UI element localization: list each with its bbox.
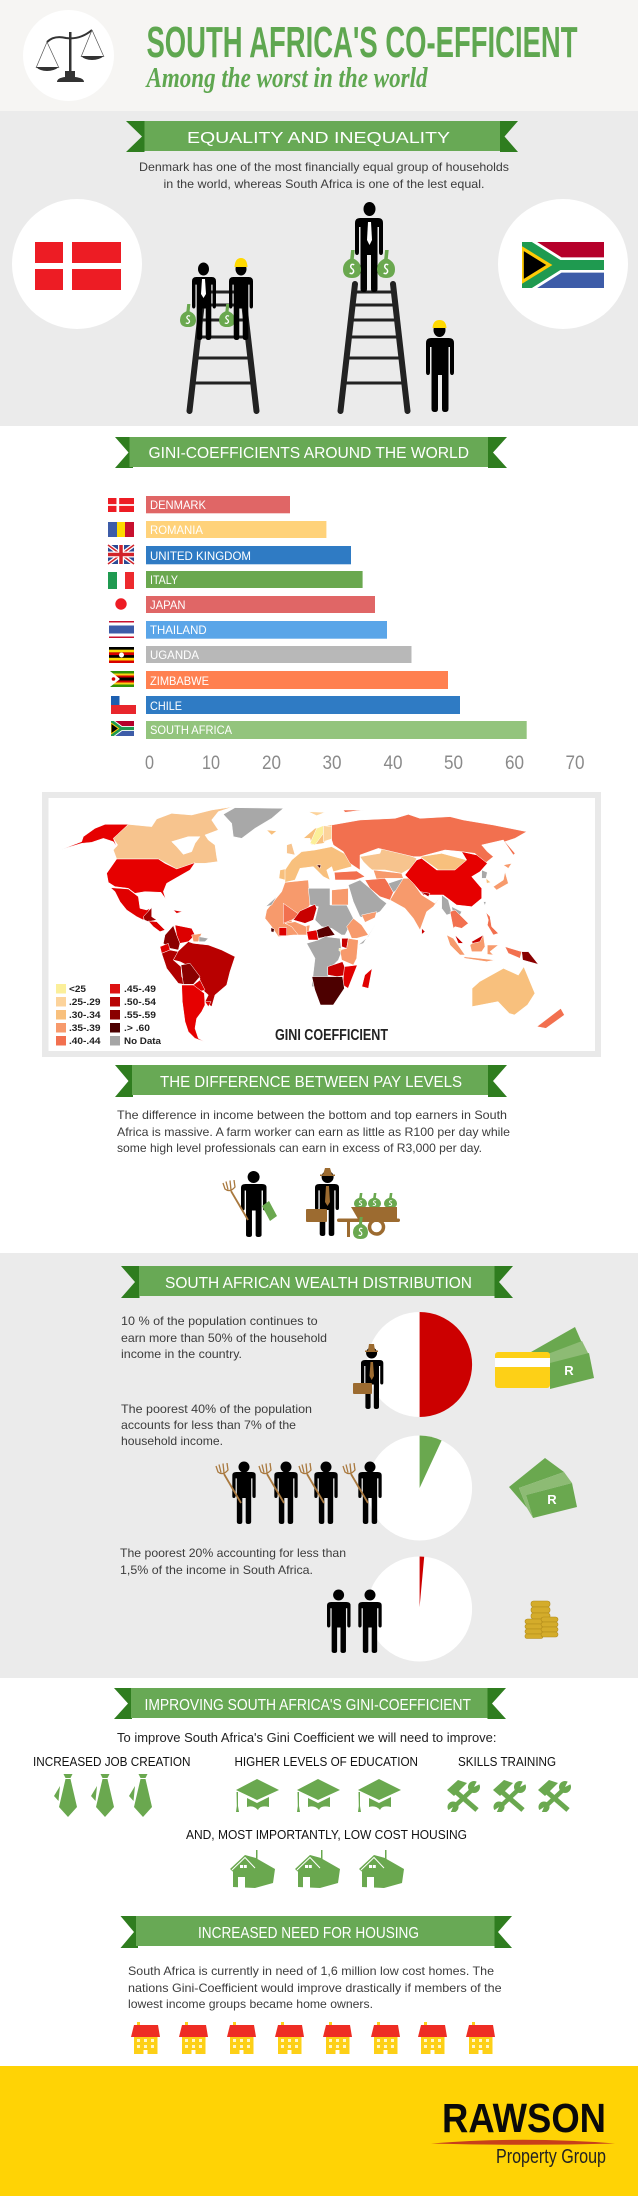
bar: Romania: ROMANIA <box>150 523 203 537</box>
text: pay levels: Africa is massive. A farm worker can earn as little as R100 per day while <box>117 1125 510 1139</box>
map legend: .25-.29 <box>69 997 100 1007</box>
bar: Japan: JAPAN <box>150 598 186 612</box>
map legend: .40-.44 <box>69 1036 100 1046</box>
column: education: HIGHER LEVELS OF EDUCATION <box>234 1754 418 1769</box>
icon: card and banknotes <box>495 1327 594 1389</box>
axis labels: 60 <box>505 753 524 774</box>
banner: equality and inequality <box>126 121 518 152</box>
bar: Chile: CHILE <box>150 699 182 713</box>
icon: farm worker with pitchfork <box>223 1171 277 1237</box>
axis labels: 10 <box>202 753 220 774</box>
bar: Denmark: DENMARK <box>150 498 206 512</box>
text: intro: Denmark has one of the most financially equal group of households <box>139 160 509 174</box>
map legend: .50-.54 <box>124 997 156 1007</box>
panel: equality and inequality <box>0 111 638 426</box>
map legend: .35-.39 <box>69 1023 100 1033</box>
bar chart: gini by country <box>108 496 584 774</box>
bar: Italy <box>108 571 363 589</box>
map: gini coefficient by country <box>62 807 565 1042</box>
bar: Chile <box>111 696 460 714</box>
icon: Denmark flag <box>12 199 142 329</box>
text: pay levels: some high level professionals can earn in excess of R3,000 per day. <box>117 1141 482 1155</box>
text: poorest 40 percent: accounts for less than 7% of the <box>121 1418 296 1432</box>
text: housing need: nations Gini-Coefficient would improve drastically if members of the <box>128 1981 502 1995</box>
column: skills training: SKILLS TRAINING <box>458 1754 556 1769</box>
text: intro: in the world, whereas South Africa is one of the lest equal. <box>164 177 484 191</box>
bar: United Kingdom <box>108 545 351 564</box>
map legend: .30-.34 <box>69 1010 100 1020</box>
column: job creation: INCREASED JOB CREATION <box>33 1754 190 1769</box>
pie chart: 7 percent <box>367 1436 472 1540</box>
axis labels: 0 <box>145 753 154 774</box>
banner: increased need for housing: INCREASED NEED FOR HOUSING <box>198 1925 419 1942</box>
axis labels: 30 <box>322 753 342 774</box>
text: intro <box>139 160 509 191</box>
banner: improving gini-coefficient <box>114 1688 506 1719</box>
logo: Rawson Property Group <box>431 2095 615 2168</box>
map region: the Americas <box>62 807 310 1042</box>
map title: GINI COEFFICIENT <box>275 1027 388 1044</box>
banner: equality and inequality: EQUALITY AND INEQUALITY <box>187 130 450 147</box>
bar: Uganda: UGANDA <box>150 648 199 662</box>
icon: banknotes <box>509 1458 577 1518</box>
illustration: unequal ladder <box>340 202 454 412</box>
bar: Zimbabwe <box>110 671 448 689</box>
illustration: equal ladder <box>180 258 256 411</box>
text: improve intro: To improve South Africa's Gini Coefficient we will need to improve: <box>117 1731 496 1745</box>
text: poorest 20 percent <box>120 1546 346 1577</box>
footer <box>0 2066 638 2196</box>
axis labels: 70 <box>566 753 584 774</box>
pie chart: 1.5 percent <box>367 1556 472 1662</box>
text: top 10 percent: income in the country. <box>121 1347 242 1361</box>
panel: south african wealth distribution <box>0 1253 638 1678</box>
bar: Japan <box>115 596 375 613</box>
bar: Denmark <box>108 496 290 513</box>
map legend: .> .60 <box>124 1023 150 1033</box>
subtitle: Among the worst in the world <box>145 63 428 94</box>
bar: Italy: ITALY <box>150 573 178 587</box>
panel: world map <box>42 792 601 1057</box>
text: poorest 40 percent: household income. <box>121 1434 223 1448</box>
map region: europe, west asia and north africa <box>285 812 467 987</box>
banner: increased need for housing <box>120 1916 512 1948</box>
bar: Thailand <box>109 621 387 639</box>
axis labels: 50 <box>444 753 463 774</box>
text: poorest 20 percent: The poorest 20% accounting for less than <box>120 1546 346 1560</box>
bar: South Africa <box>111 721 527 739</box>
axis labels <box>145 753 584 774</box>
icon: card and banknotes: R <box>564 1363 574 1378</box>
column: education <box>234 1754 418 1812</box>
bar: South Africa: SOUTH AFRICA <box>150 723 232 737</box>
bar: Uganda <box>109 646 412 663</box>
icon: four farm workers <box>216 1462 382 1524</box>
text: pay levels <box>117 1108 510 1155</box>
text: housing need: South Africa is currently in need of 1,6 million low cost homes. The <box>128 1964 494 1978</box>
banner: wealth distribution <box>121 1266 513 1298</box>
bar: United Kingdom: UNITED KINGDOM <box>150 549 251 563</box>
map legend: .45-.49 <box>124 984 156 994</box>
icon: professional <box>353 1344 383 1409</box>
map region: southern africa, australia and new zealand <box>312 962 565 1028</box>
column: job creation <box>33 1754 190 1817</box>
banner: gini-coefficients around the world: GINI-COEFFICIENTS AROUND THE WORLD <box>148 445 469 462</box>
text: poorest 40 percent: The poorest 40% of the population <box>121 1402 312 1416</box>
bar: Romania <box>108 521 326 538</box>
text: housing need: lowest income groups became home owners. <box>128 1997 373 2011</box>
axis labels: 40 <box>384 753 402 774</box>
column: low cost housing <box>186 1827 467 1888</box>
map legend: <25 <box>69 984 86 994</box>
bar: Thailand: THAILAND <box>150 623 207 637</box>
text: top 10 percent: earn more than 50% of the household <box>121 1331 327 1345</box>
text: pay levels: The difference in income between the bottom and top earners in South <box>117 1108 507 1122</box>
banner: wealth distribution: SOUTH AFRICAN WEALTH DISTRIBUTION <box>165 1275 472 1292</box>
column: low cost housing: AND, MOST IMPORTANTLY, LOW COST HOUSING <box>186 1827 467 1842</box>
axis labels: 20 <box>262 753 281 774</box>
logo: Rawson Property Group: Property Group <box>496 2146 606 2168</box>
map legend: .55-.59 <box>124 1010 156 1020</box>
map region: north and east asia <box>332 810 538 964</box>
bar: Zimbabwe: ZIMBABWE <box>150 674 209 688</box>
icon: two people <box>327 1590 382 1653</box>
text: poorest 20 percent: 1,5% of the income in South Africa. <box>120 1563 313 1577</box>
header band <box>0 0 638 111</box>
text: housing need <box>128 1964 502 2011</box>
icon: coins <box>525 1601 558 1638</box>
column: skills training <box>447 1754 573 1814</box>
map legend: No Data <box>124 1036 162 1046</box>
icon: banknotes: R <box>547 1492 557 1507</box>
logo: Rawson Property Group: RAWSON <box>442 2095 606 2141</box>
text: top 10 percent <box>121 1314 327 1361</box>
banner: gini-coefficients around the world <box>115 437 507 468</box>
map legend <box>56 984 162 1046</box>
icon: scales of justice <box>23 10 114 101</box>
banner: improving gini-coefficient: IMPROVING SOUTH AFRICA'S GINI-COEFFICIENT <box>144 1697 471 1714</box>
text: top 10 percent: 10 % of the population continues to <box>121 1314 318 1328</box>
pie chart: 50 percent <box>367 1312 472 1417</box>
banner: the difference between pay levels: THE DIFFERENCE BETWEEN PAY LEVELS <box>160 1074 462 1091</box>
icon row: eight small houses <box>131 2022 495 2054</box>
icon: South Africa flag <box>498 199 628 329</box>
banner: the difference between pay levels <box>115 1065 507 1097</box>
icon: professional with wheelbarrow of money <box>306 1168 400 1239</box>
text: poorest 40 percent <box>121 1402 312 1448</box>
